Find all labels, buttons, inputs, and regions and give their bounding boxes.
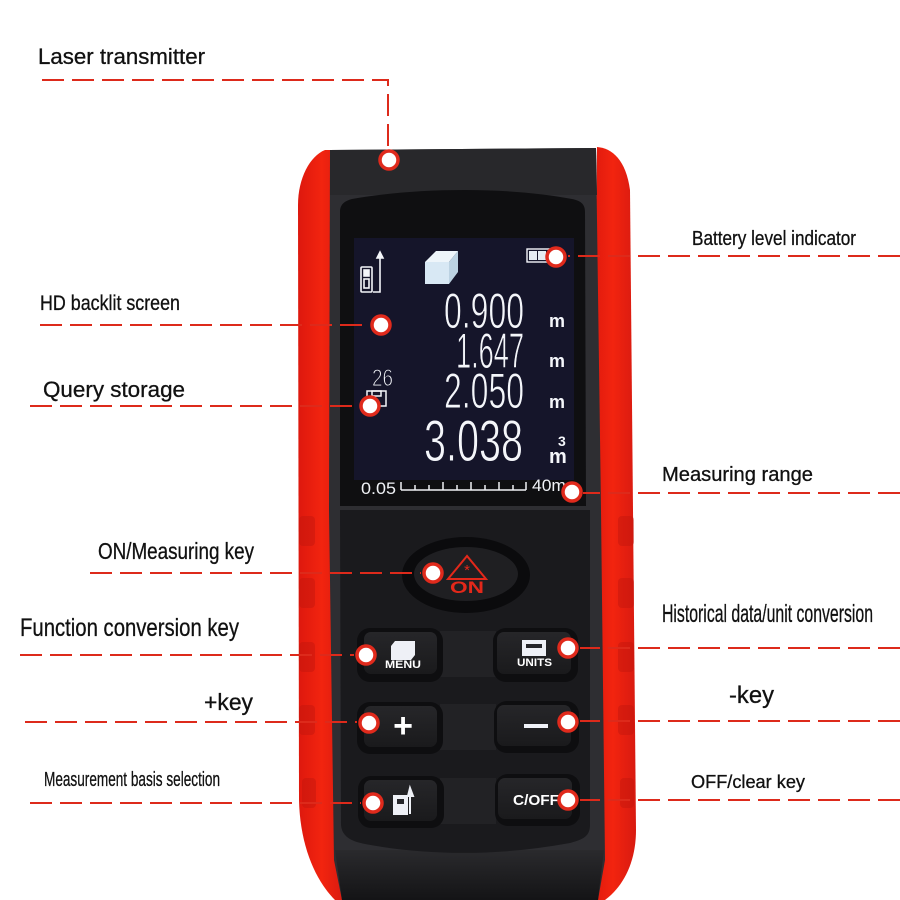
LCD: readings: m <box>549 392 565 412</box>
button: measurement basis <box>358 776 444 828</box>
red left grip <box>298 150 345 900</box>
callout: measurement basis selection <box>30 769 382 812</box>
screen bezel <box>340 190 586 506</box>
LCD: cube icon <box>425 251 458 284</box>
key panel <box>340 510 590 853</box>
reading 1.647: 1.647 <box>456 323 524 379</box>
callout: plus key <box>25 689 378 732</box>
LCD: readings: 3 <box>558 433 566 449</box>
callout: function conversion key <box>20 614 375 664</box>
LCD: readings: m <box>549 446 567 468</box>
LCD: battery icon <box>527 249 554 262</box>
callout: ON/measuring key <box>90 538 442 582</box>
button: UNITS: UNITS <box>517 657 552 669</box>
label: Query storage <box>43 377 185 402</box>
ON button: * <box>464 562 470 579</box>
callout: laser transmitter <box>38 44 398 169</box>
label: Function conversion key <box>20 614 239 642</box>
button: plus: + <box>393 707 413 745</box>
range scale: 40m <box>532 476 566 495</box>
callout: OFF/clear key <box>559 772 900 809</box>
button: UNITS <box>493 628 578 682</box>
callout: battery level indicator <box>547 228 900 266</box>
button: MENU: MENU <box>385 659 421 671</box>
device body <box>298 147 636 900</box>
red right grip <box>590 147 636 900</box>
ON button: ON <box>450 578 484 597</box>
dark faceplate <box>329 148 605 900</box>
LCD: floppy icon <box>367 391 386 406</box>
LCD: height mode icon <box>361 252 383 292</box>
LCD panel <box>354 238 574 480</box>
range scale: 0.05 <box>361 479 396 498</box>
units: m <box>549 311 565 331</box>
button: plus <box>357 702 443 754</box>
connector bars <box>440 631 496 824</box>
label: OFF/clear key <box>691 772 805 792</box>
label: -key <box>729 682 774 709</box>
label: Battery level indicator <box>692 228 856 250</box>
grip ribs <box>299 516 634 808</box>
callout: HD backlit screen <box>40 292 390 334</box>
LCD: readings: m <box>549 351 565 371</box>
callout: measuring range <box>563 464 900 501</box>
reading 0.900: 0.900 <box>444 283 524 339</box>
callout: minus key <box>559 682 900 731</box>
button: C/OFF <box>495 774 580 826</box>
memory count: 26 <box>372 365 393 392</box>
button: MENU <box>357 628 443 682</box>
label: ON/Measuring key <box>98 538 254 564</box>
label: +key <box>204 689 253 715</box>
callout: query storage <box>30 377 379 415</box>
reading 2.050: 2.050 <box>444 363 524 419</box>
LCD: readings <box>372 283 567 474</box>
reading 3.038: 3.038 <box>424 409 523 474</box>
button: C/OFF: C/OFF <box>513 792 559 809</box>
label: Laser transmitter <box>38 44 205 69</box>
ON button <box>402 537 530 613</box>
range scale <box>361 476 566 498</box>
callout: historical data/unit conversion <box>559 600 900 657</box>
label: HD backlit screen <box>40 292 180 315</box>
label: Measuring range <box>662 464 813 486</box>
button: minus <box>494 701 579 753</box>
label: Measurement basis selection <box>44 769 220 791</box>
